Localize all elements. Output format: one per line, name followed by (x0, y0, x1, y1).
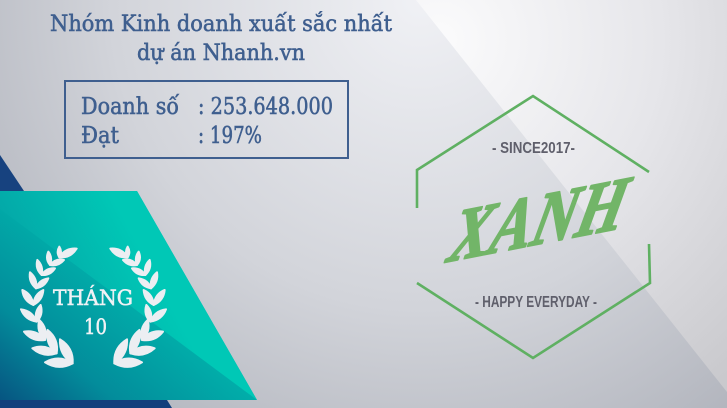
title (50, 11, 392, 66)
sales figures: Doanh số (81, 94, 180, 120)
month label (53, 286, 133, 339)
sales figures: Đạt (81, 123, 120, 149)
tagline: - HAPPY EVERYDAY - (475, 294, 597, 311)
sales figures: : 253.648.000 (198, 94, 333, 120)
title: Nhóm Kinh doanh xuất sắc nhất (50, 11, 392, 37)
panel: sales results box (65, 81, 348, 158)
sales figures (81, 94, 333, 149)
sales figures: : 197% (198, 123, 262, 149)
panel: teal month badge (0, 191, 257, 400)
brand name: XANH (440, 161, 638, 280)
navy bottom band (0, 400, 172, 408)
title: dự án Nhanh.vn (137, 41, 305, 66)
navy corner shape (0, 155, 24, 191)
month label: THÁNG (53, 286, 133, 310)
right laurel branch (110, 247, 166, 367)
month label: 10 (84, 315, 107, 339)
since label: - SINCE2017- (492, 140, 575, 157)
light diagonal panel (416, 0, 727, 392)
left laurel branch (21, 247, 77, 367)
icon: laurel wreath (21, 247, 166, 367)
logo: hexagon badge (417, 96, 650, 358)
hexagon outline (417, 96, 650, 358)
